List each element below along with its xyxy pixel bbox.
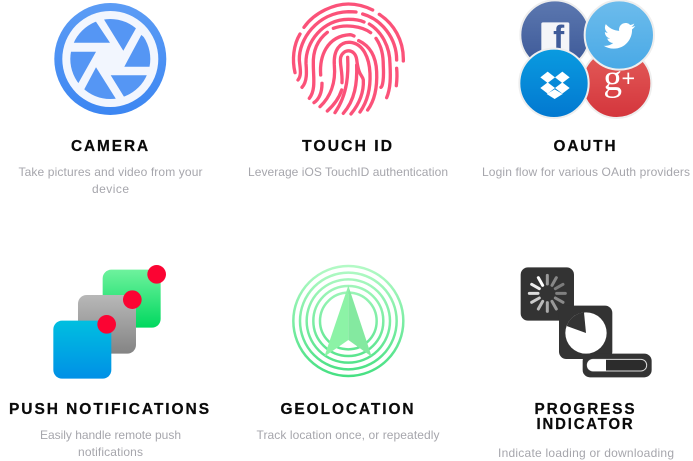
facebook badge: f [553,20,565,57]
google plus badge: g [603,58,622,99]
icon: progress indicators [521,267,652,377]
heading: push notifications: PUSH NOTIFICATIONS [9,401,211,418]
heading: progress indicator [534,401,636,433]
icon: geolocation [293,266,403,376]
heading: progress indicator: INDICATOR [536,416,634,433]
icon: push notifications [53,265,166,379]
heading: progress indicator: PROGRESS [534,401,636,418]
text: camera description [18,165,202,196]
heading: touch id: TOUCH ID [302,138,394,155]
google plus badge [582,49,651,118]
icon: camera aperture [54,3,166,115]
text: push notifications description: notifications [78,445,143,459]
text: geolocation description: Track location once, or repeatedly [256,428,440,442]
icon: fingerprint [293,4,403,114]
google plus badge: + [622,65,635,91]
heading: geolocation: GEOLOCATION [280,401,416,418]
dropbox badge [519,49,589,118]
text: camera description: device [92,182,129,196]
twitter badge [585,0,654,70]
text: camera description: Take pictures and video from your [18,165,202,179]
text: progress indicator description: Indicate loading or downloading [498,446,674,460]
text: oauth description: Login flow for various OAuth providers [482,165,690,179]
heading: camera: CAMERA [71,138,150,155]
text: touch id description: Leverage iOS TouchID authentication [248,165,448,179]
icon: social logins [519,0,654,118]
heading: oauth: OAUTH [554,138,618,155]
text: push notifications description [40,428,181,459]
text: push notifications description: Easily handle remote push [40,428,181,442]
